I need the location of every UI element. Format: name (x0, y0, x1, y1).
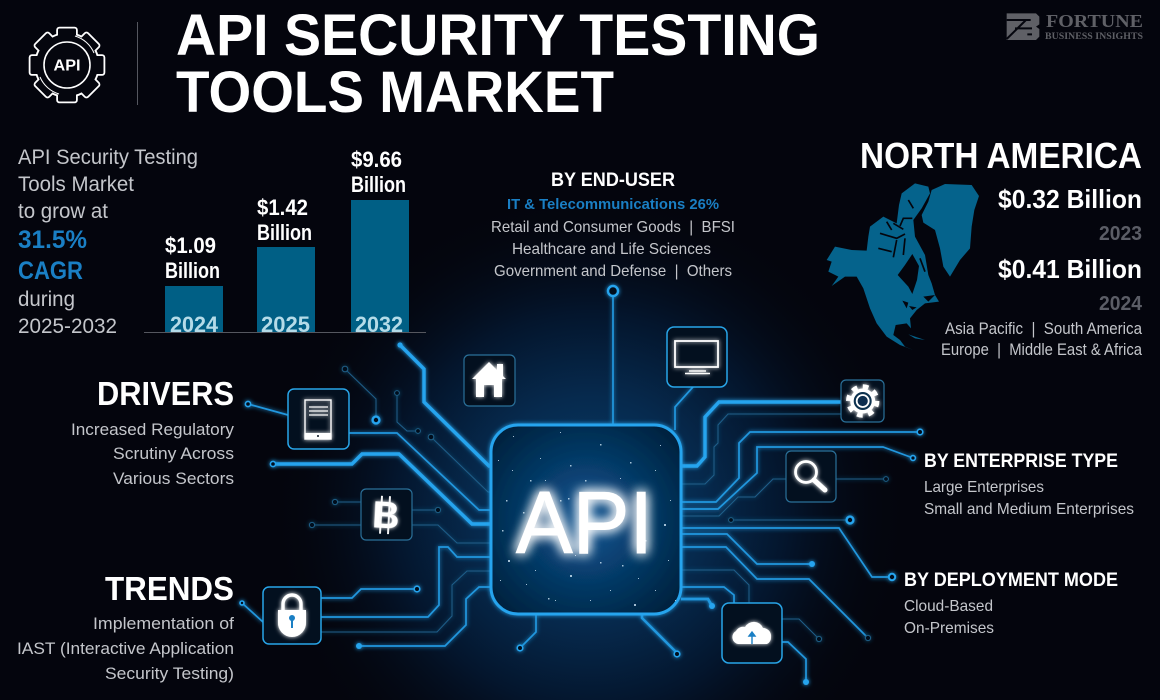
logo: API gear icon (30, 28, 104, 102)
growth statement: Tools Market (18, 173, 134, 196)
bar chart: $1.42 (257, 195, 308, 220)
panel: by deployment mode (904, 570, 1118, 637)
icon: magnifier (786, 451, 836, 502)
bar chart: $9.66 (351, 147, 402, 172)
icon: bitcoin (361, 489, 412, 540)
panel: north america: Asia Pacific | South America (945, 320, 1143, 338)
panel: north america: $0.32 Billion (998, 184, 1142, 214)
panel: trends: Security Testing) (105, 664, 234, 683)
panel: by end-user: Government and Defense | Others (494, 263, 732, 280)
title (176, 3, 820, 125)
panel: north america: Europe | Middle East & Africa (941, 341, 1143, 359)
icon: monitor (667, 327, 727, 387)
panel: by end-user: BY END-USER (551, 170, 675, 191)
growth statement: during (18, 288, 75, 311)
panel: trends: TRENDS (105, 570, 234, 607)
icon: house (464, 355, 515, 406)
panel: drivers: Various Sectors (113, 469, 234, 488)
panel: north america: 2023 (1099, 223, 1142, 245)
central API chip (491, 425, 681, 614)
panel: north america: NORTH AMERICA (860, 135, 1142, 176)
panel: trends (17, 570, 234, 683)
panel: drivers: Scrutiny Across (113, 444, 234, 463)
trace end nodes (240, 286, 923, 685)
title: API SECURITY TESTING (176, 3, 820, 68)
panel: drivers: DRIVERS (97, 375, 234, 412)
panel: by enterprise type (924, 451, 1134, 518)
icon: padlock (263, 587, 321, 644)
bar chart: 2025 (261, 312, 310, 337)
bar chart: Billion (165, 258, 220, 283)
bar chart (144, 147, 426, 337)
icon: gear (841, 380, 884, 422)
panel: drivers (71, 375, 235, 488)
panel: drivers: Increased Regulatory (71, 420, 235, 439)
panel: by enterprise type: BY ENTERPRISE TYPE (924, 451, 1118, 472)
growth statement: API Security Testing (18, 146, 198, 169)
panel: trends: IAST (Interactive Application (17, 639, 234, 658)
bar chart: Billion (351, 172, 406, 197)
header divider (137, 22, 138, 105)
bar chart: 2024 (170, 312, 219, 337)
circuit traces (242, 291, 920, 682)
logo: API gear icon: API (53, 58, 81, 74)
brand logo: Fortune Business Insights: BUSINESS INSIGHTS (1045, 32, 1143, 42)
panel: by end-user (491, 170, 735, 280)
particles (498, 432, 676, 606)
panel: by enterprise type: Small and Medium Enterprises (924, 501, 1134, 518)
icon: bitcoin: B (371, 494, 401, 538)
panel: trends: Implementation of (93, 614, 234, 633)
panel: by deployment mode: On-Premises (904, 620, 994, 637)
icon: tablet (288, 389, 349, 449)
panel: north america (827, 135, 1143, 359)
growth statement (18, 146, 198, 338)
panel: by enterprise type: Large Enterprises (924, 479, 1044, 496)
panel: by deployment mode: BY DEPLOYMENT MODE (904, 570, 1118, 591)
panel: by end-user: Healthcare and Life Sciences (512, 241, 711, 258)
growth statement: 31.5% (18, 226, 87, 254)
bar chart: $1.09 (165, 233, 216, 258)
growth statement: to grow at (18, 200, 108, 223)
panel: north america: 2024 (1099, 293, 1143, 315)
map: north america (827, 183, 979, 350)
brand logo: Fortune Business Insights (1007, 11, 1143, 42)
growth statement: CAGR (18, 257, 83, 285)
panel: north america: $0.41 Billion (998, 254, 1142, 284)
panel: by deployment mode: Cloud-Based (904, 598, 993, 615)
bar chart: 2032 (355, 312, 403, 337)
chip label: API (516, 473, 653, 572)
panel: by end-user: IT & Telecommunications 26% (507, 196, 719, 213)
icon: cloud upload (722, 603, 782, 663)
title: TOOLS MARKET (176, 60, 614, 125)
bar chart: Billion (257, 220, 312, 245)
brand logo: Fortune Business Insights: FORTUNE (1046, 11, 1143, 31)
panel: by end-user: Retail and Consumer Goods | BFSI (491, 219, 735, 236)
growth statement: 2025-2032 (18, 315, 117, 338)
